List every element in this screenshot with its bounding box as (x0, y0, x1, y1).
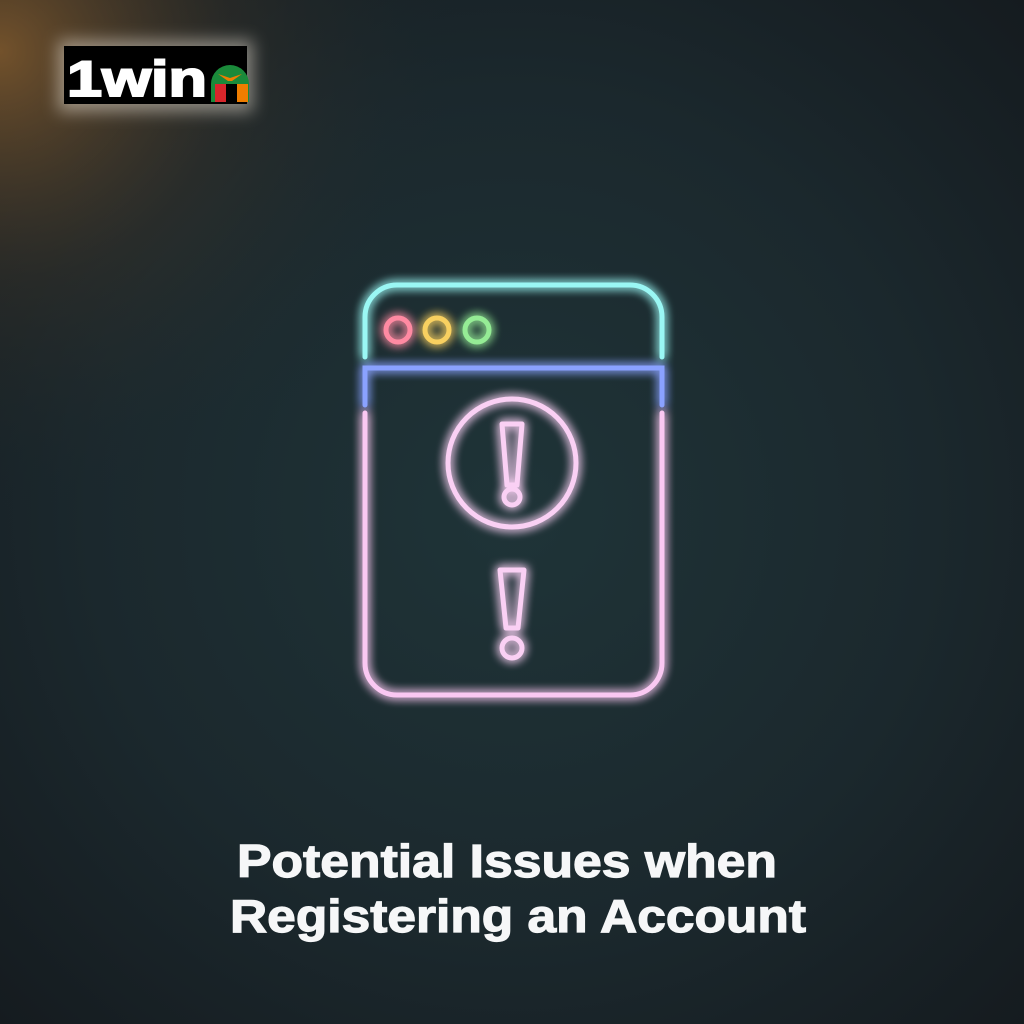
warning circle (448, 399, 576, 527)
browser dots (386, 318, 410, 342)
top frame (365, 285, 662, 357)
divider (365, 368, 662, 405)
title: Potential Issues when (237, 835, 777, 887)
title (230, 835, 806, 942)
body (365, 413, 662, 695)
logo: 1win: 1win (67, 51, 207, 107)
icon: zambia flag (211, 65, 249, 102)
logo: 1win (58, 40, 253, 112)
exclamation (500, 570, 524, 658)
title: Registering an Account (230, 890, 806, 942)
icon: neon browser window with warnings (365, 285, 662, 695)
